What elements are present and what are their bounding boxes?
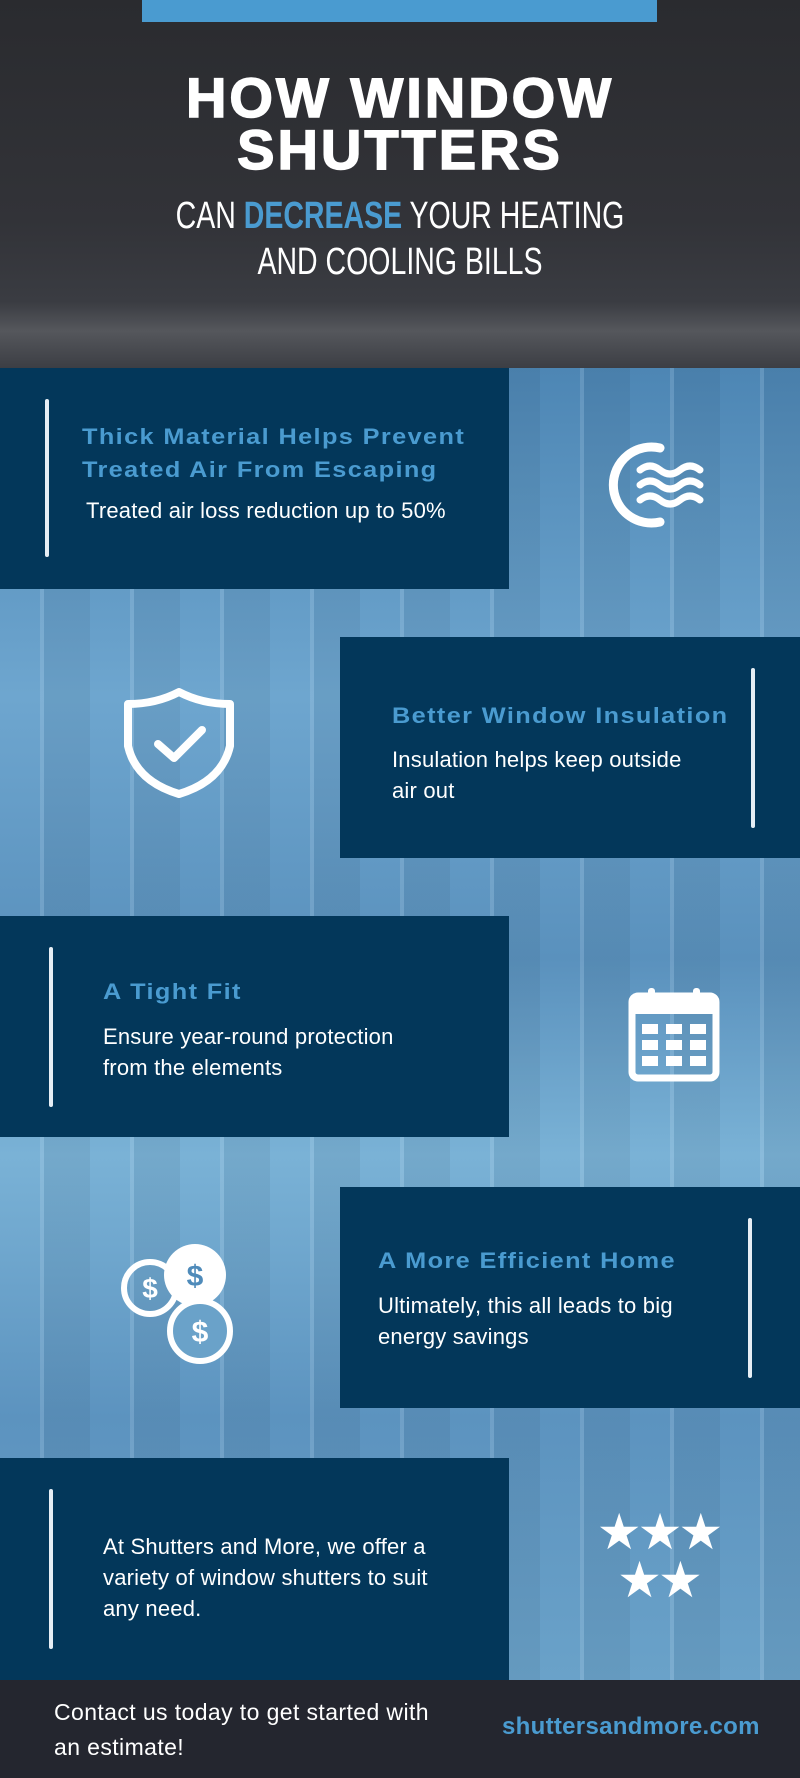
- text: energy savings: [378, 1324, 529, 1349]
- text: [392, 747, 682, 803]
- heading: A Tight Fit: [103, 979, 242, 1004]
- text: from the elements: [103, 1055, 282, 1080]
- text: any need.: [103, 1596, 201, 1621]
- icon: stars: ★★★: [597, 1504, 719, 1560]
- icon: shield: [124, 688, 234, 798]
- heading: [82, 424, 465, 482]
- panel: thick material: [0, 368, 509, 589]
- text: variety of window shutters to suit: [103, 1565, 428, 1590]
- title: SHUTTERS: [237, 118, 563, 181]
- text: Insulation helps keep outside: [392, 747, 682, 772]
- text: At Shutters and More, we offer a: [103, 1534, 426, 1559]
- icon: stars: ★★: [617, 1552, 699, 1608]
- heading: A More Efficient Home: [378, 1248, 676, 1273]
- icon: coins: $: [187, 1260, 204, 1293]
- text: [103, 1024, 394, 1080]
- text: [103, 1534, 428, 1621]
- background photo: [0, 368, 800, 1680]
- footer: [0, 1680, 800, 1778]
- contact text: an estimate!: [54, 1734, 184, 1760]
- icon: air: [608, 442, 704, 528]
- text: air out: [392, 778, 455, 803]
- top accent bar: [142, 0, 657, 22]
- heading: Thick Material Helps Prevent: [82, 424, 465, 449]
- title: [186, 66, 614, 181]
- panel: efficient home: [340, 1187, 800, 1408]
- text: Ensure year-round protection: [103, 1024, 394, 1049]
- panel: tight fit: [0, 916, 509, 1137]
- heading: Treated Air From Escaping: [82, 457, 438, 482]
- panel: closing: [0, 1458, 509, 1680]
- text: Treated air loss reduction up to 50%: [86, 498, 446, 523]
- subtitle: AND COOLING BILLS: [257, 241, 543, 283]
- heading: Better Window Insulation: [392, 703, 729, 728]
- text: Ultimately, this all leads to big: [378, 1293, 673, 1318]
- header: [0, 0, 800, 368]
- text: [378, 1293, 673, 1349]
- contact text: [54, 1699, 429, 1760]
- website: shuttersandmore.com: [502, 1713, 760, 1740]
- icon: coins: $: [192, 1316, 209, 1349]
- icon: coins: $: [142, 1273, 158, 1304]
- subtitle: CAN DECREASE YOUR HEATING: [176, 195, 624, 237]
- panel: insulation: [340, 637, 800, 858]
- title: HOW WINDOW: [186, 66, 614, 129]
- contact text: Contact us today to get started with: [54, 1699, 429, 1725]
- icon: stars: [597, 1504, 720, 1608]
- subtitle: [176, 195, 624, 283]
- icon: coins: [121, 1244, 233, 1364]
- icon: calendar: [628, 988, 720, 1082]
